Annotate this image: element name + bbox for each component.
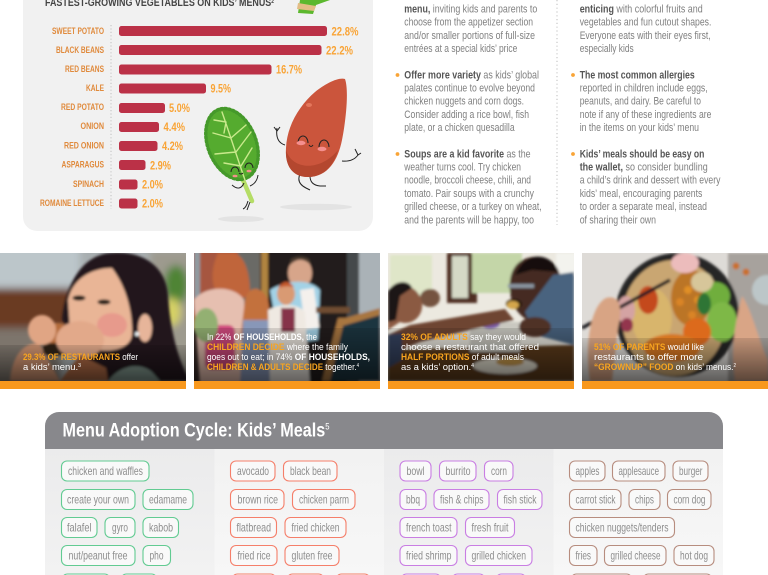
- pill: chicken nuggets/tenders: [576, 521, 669, 534]
- pill: kabob: [149, 521, 173, 534]
- caption: 32% of adults: choose a restaurant that offered: [401, 342, 539, 352]
- text column: menu tips right: [571, 4, 721, 226]
- pill: chips: [635, 493, 654, 506]
- text: smaller portions tip: entrées at a special kids’ price: [404, 43, 517, 55]
- pill: [484, 461, 513, 481]
- text: the most common allergies: reported in children include eggs,: [580, 83, 708, 95]
- column: inception items (green): [62, 461, 193, 575]
- text: easy on the wallet: [571, 148, 721, 226]
- pill: [400, 518, 457, 538]
- pill: bowl: [406, 465, 424, 478]
- column: ubiquity items (brown): [570, 461, 714, 575]
- text: offer more variety: Consider adding a rice bowl, fish: [404, 109, 529, 121]
- text: smaller portions tip: and/or smaller portions of full-size: [404, 30, 535, 42]
- text: offer more variety: plate, or a chicken quesadilla: [404, 122, 515, 134]
- bar: red onion: 4.2%: [162, 139, 183, 153]
- pill: grilled chicken: [472, 549, 526, 562]
- bar chart: vegetables: [40, 24, 359, 210]
- caption: 29.3% of restaurants: [23, 352, 138, 372]
- pill: edamame: [149, 493, 187, 506]
- caption: 29.3% of restaurants: a kids’ menu.: [23, 362, 77, 372]
- bar: red potato: [61, 101, 190, 115]
- text: easy on the wallet: of sharing their own: [580, 214, 656, 226]
- pill: hot dog: [680, 549, 708, 562]
- bar: asparagus: 2.9%: [150, 158, 171, 172]
- text: offer more variety: palates continue to evolve beyond: [404, 83, 535, 95]
- pill: chicken and waffles: [68, 465, 143, 478]
- pill: apples: [576, 465, 600, 478]
- bar: sweet potato: SWEET POTATO: [52, 26, 104, 36]
- text: soups are a kid favorite: weather turns cool. Try chicken: [404, 162, 521, 174]
- pill: [674, 546, 714, 566]
- pill: [570, 461, 605, 481]
- bar: asparagus: [62, 158, 171, 172]
- caption: 32% of adults: 32% OF ADULTS say they would: [401, 332, 526, 342]
- pill: fresh fruit: [472, 521, 509, 534]
- bar: red potato: 5.0%: [169, 101, 190, 115]
- caption: 22% of households: 4: [357, 363, 359, 369]
- caption: 22% of households: CHILDREN DECIDE where the family: [207, 342, 348, 352]
- caption: 51% of parents: [594, 342, 736, 372]
- caption: 22% of households: CHILDREN & ADULTS DECIDE together.: [207, 362, 361, 372]
- pill: corn: [491, 465, 507, 478]
- pill: [570, 490, 621, 510]
- bar: red onion: RED ONION: [64, 140, 104, 150]
- pill: avocado: [237, 465, 269, 478]
- orange bar: [0, 381, 186, 389]
- pill: chicken parm: [299, 493, 349, 506]
- bar: asparagus: ASPARAGUS: [62, 160, 104, 170]
- caption: 32% of adults: as a kids’ option.: [401, 362, 469, 372]
- pill: [466, 518, 514, 538]
- photo panel: girl eating burger: [0, 253, 186, 389]
- text: easy on the wallet: a child’s drink and dessert with every: [580, 175, 721, 187]
- text: easy on the wallet: Kids’ meals should be easy on: [580, 148, 705, 160]
- orange bar: [582, 381, 768, 389]
- bar: red beans: [65, 62, 302, 76]
- column: proliferation items (purple): [400, 461, 542, 575]
- pill: brown rice: [238, 493, 278, 506]
- caption: 22% of households: [207, 332, 370, 372]
- caption: 29.3% of restaurants: 29.3% OF RESTAURANTS offer: [23, 352, 138, 362]
- caption: 51% of parents: 2: [733, 363, 736, 369]
- text: smaller portions tip: choose from the appetizer section: [404, 17, 533, 29]
- pill: fish stick: [504, 493, 537, 506]
- text: the most common allergies: [571, 69, 711, 134]
- panel: fastest-growing vegetables: [23, 0, 373, 231]
- pill: [434, 490, 489, 510]
- illustration: happy sweet potato: [274, 79, 361, 210]
- pill: [570, 518, 674, 538]
- pill: [440, 461, 476, 481]
- bar: kale: 9.5%: [210, 82, 231, 96]
- bar: romaine lettuce: 2.0%: [142, 196, 163, 210]
- pill: black bean: [290, 465, 331, 478]
- pill: fries: [576, 549, 591, 562]
- column: adoption items (red): [230, 461, 370, 575]
- panel: menu adoption cycle: [45, 412, 723, 575]
- caption: 22% of households: In 22% OF HOUSEHOLDS, the: [207, 332, 317, 342]
- pill: burger: [679, 465, 703, 478]
- text: enticing food tip: [580, 4, 711, 55]
- pill: fish & chips: [440, 493, 484, 506]
- text: the most common allergies: peanuts, and dairy. Be careful to: [580, 96, 701, 108]
- text: soups are a kid favorite: noodle, broccoli cheese, chili, and: [404, 175, 531, 187]
- text: smaller portions tip: [404, 4, 537, 55]
- text: soups are a kid favorite: [396, 148, 542, 226]
- pill: fried chicken: [292, 521, 340, 534]
- text: enticing food tip: vegetables and fun cutout shapes.: [580, 17, 711, 29]
- caption: 51% of parents: restaurants to offer more: [594, 352, 703, 362]
- text: easy on the wallet: the wallet, so consider bundling: [580, 162, 708, 174]
- header: menu adoption cycle: [45, 412, 723, 449]
- pill: [400, 490, 426, 510]
- bar: kale: [86, 82, 231, 96]
- bar: red potato: RED POTATO: [61, 102, 104, 112]
- text: soups are a kid favorite: tomato. Pair soups with a crunchy: [404, 188, 534, 200]
- caption: 51% of parents: 51% OF PARENTS would like: [594, 342, 704, 352]
- bar: red beans: RED BEANS: [65, 64, 104, 74]
- pill: fried rice: [238, 549, 270, 562]
- pill: bbq: [406, 493, 420, 506]
- pill: create your own: [67, 493, 129, 506]
- pill: applesauce: [618, 465, 659, 478]
- pill: burrito: [446, 465, 470, 478]
- pill: [604, 546, 666, 566]
- caption: 32% of adults: HALF PORTIONS of adult meals: [401, 352, 524, 362]
- illustration: happy kale leaf: [196, 101, 268, 222]
- pill: [400, 461, 431, 481]
- text: enticing food tip: enticing with colorful fruits and: [580, 4, 703, 16]
- bar: black beans: 22.2%: [326, 44, 353, 58]
- pill: carrot stick: [576, 493, 616, 506]
- header: menu adoption cycle: Menu Adoption Cycle: Kids’ Meals: [62, 420, 371, 442]
- text: offer more variety: chicken nuggets and corn dogs.: [404, 96, 524, 108]
- bar: romaine lettuce: [40, 196, 163, 210]
- bar: spinach: [73, 178, 163, 192]
- bar: sweet potato: [52, 24, 359, 38]
- text: the most common allergies: The most common allergies: [580, 69, 695, 81]
- photo panel: family at restaurant: [190, 250, 383, 390]
- bar: spinach: SPINACH: [73, 179, 104, 189]
- text: soups are a kid favorite: grilled cheese, or a turkey on wheat,: [404, 201, 542, 213]
- pill: [400, 546, 457, 566]
- pill: fried shrimp: [406, 549, 452, 562]
- pill: [629, 490, 660, 510]
- text: soups are a kid favorite: Soups are a kid favorite as the: [404, 148, 531, 160]
- bar: romaine lettuce: ROMAINE LETTUCE: [40, 198, 104, 208]
- bar: spinach: 2.0%: [142, 178, 163, 192]
- pill: grilled cheese: [610, 549, 660, 562]
- bar: kale: KALE: [86, 83, 104, 93]
- bar: onion: [80, 120, 185, 134]
- orange bar: [194, 381, 380, 389]
- text: the most common allergies: note if any of these ingredients are: [580, 109, 711, 121]
- bar: red onion: [64, 139, 183, 153]
- pill: [498, 490, 542, 510]
- pill: falafel: [67, 521, 92, 534]
- photo panel: father and child sharing food: [388, 253, 576, 389]
- text: the most common allergies: in the items on your kids’ menu: [580, 122, 699, 134]
- icon: asparagus bundle: [297, 0, 330, 14]
- caption: 32% of adults: [401, 332, 539, 372]
- text: enticing food tip: especially kids: [580, 43, 634, 55]
- header: menu adoption cycle: 5: [325, 422, 330, 432]
- pill: [466, 546, 532, 566]
- caption: 32% of adults: 4: [471, 363, 474, 369]
- orange bar: [388, 381, 574, 389]
- text: smaller portions tip: menu, inviting kids and parents to: [404, 4, 537, 16]
- bar: sweet potato: 22.8%: [332, 24, 359, 38]
- bar: onion: ONION: [80, 121, 104, 131]
- pill: [673, 461, 708, 481]
- photo panel: grownup food bowl: [582, 253, 768, 389]
- bar: onion: 4.4%: [164, 120, 185, 134]
- text: easy on the wallet: to order a separate meal, instead: [580, 201, 707, 213]
- text: enticing food tip: Everyone eats with their eyes first,: [580, 30, 711, 42]
- text: soups are a kid favorite: and the parents will be happy, too: [404, 214, 534, 226]
- caption: 22% of households: goes out to eat; in 74% OF HOUSEHOLDS,: [207, 352, 370, 362]
- caption: 51% of parents: “GROWNUP” FOOD on kids’ menus.: [594, 362, 739, 372]
- pill: nut/peanut free: [68, 549, 128, 562]
- bar: black beans: BLACK BEANS: [56, 45, 104, 55]
- text: offer more variety: Offer more variety as kids’ global: [404, 69, 539, 81]
- text column: menu tips left: [396, 4, 542, 226]
- pill: [668, 490, 711, 510]
- bar: black beans: [56, 44, 353, 58]
- bar: red beans: 16.7%: [276, 62, 302, 76]
- pill: corn dog: [674, 493, 706, 506]
- pill: gyro: [112, 521, 128, 534]
- pill: [612, 461, 665, 481]
- pill: french toast: [406, 521, 452, 534]
- caption: 29.3% of restaurants: 3: [78, 363, 81, 369]
- pill: pho: [150, 549, 164, 562]
- pill: [570, 546, 597, 566]
- pill: gluten free: [292, 549, 332, 562]
- text: offer more variety: [396, 69, 539, 134]
- pill: flatbread: [236, 521, 271, 534]
- text: easy on the wallet: kids’ meal, encouraging parents: [580, 188, 703, 200]
